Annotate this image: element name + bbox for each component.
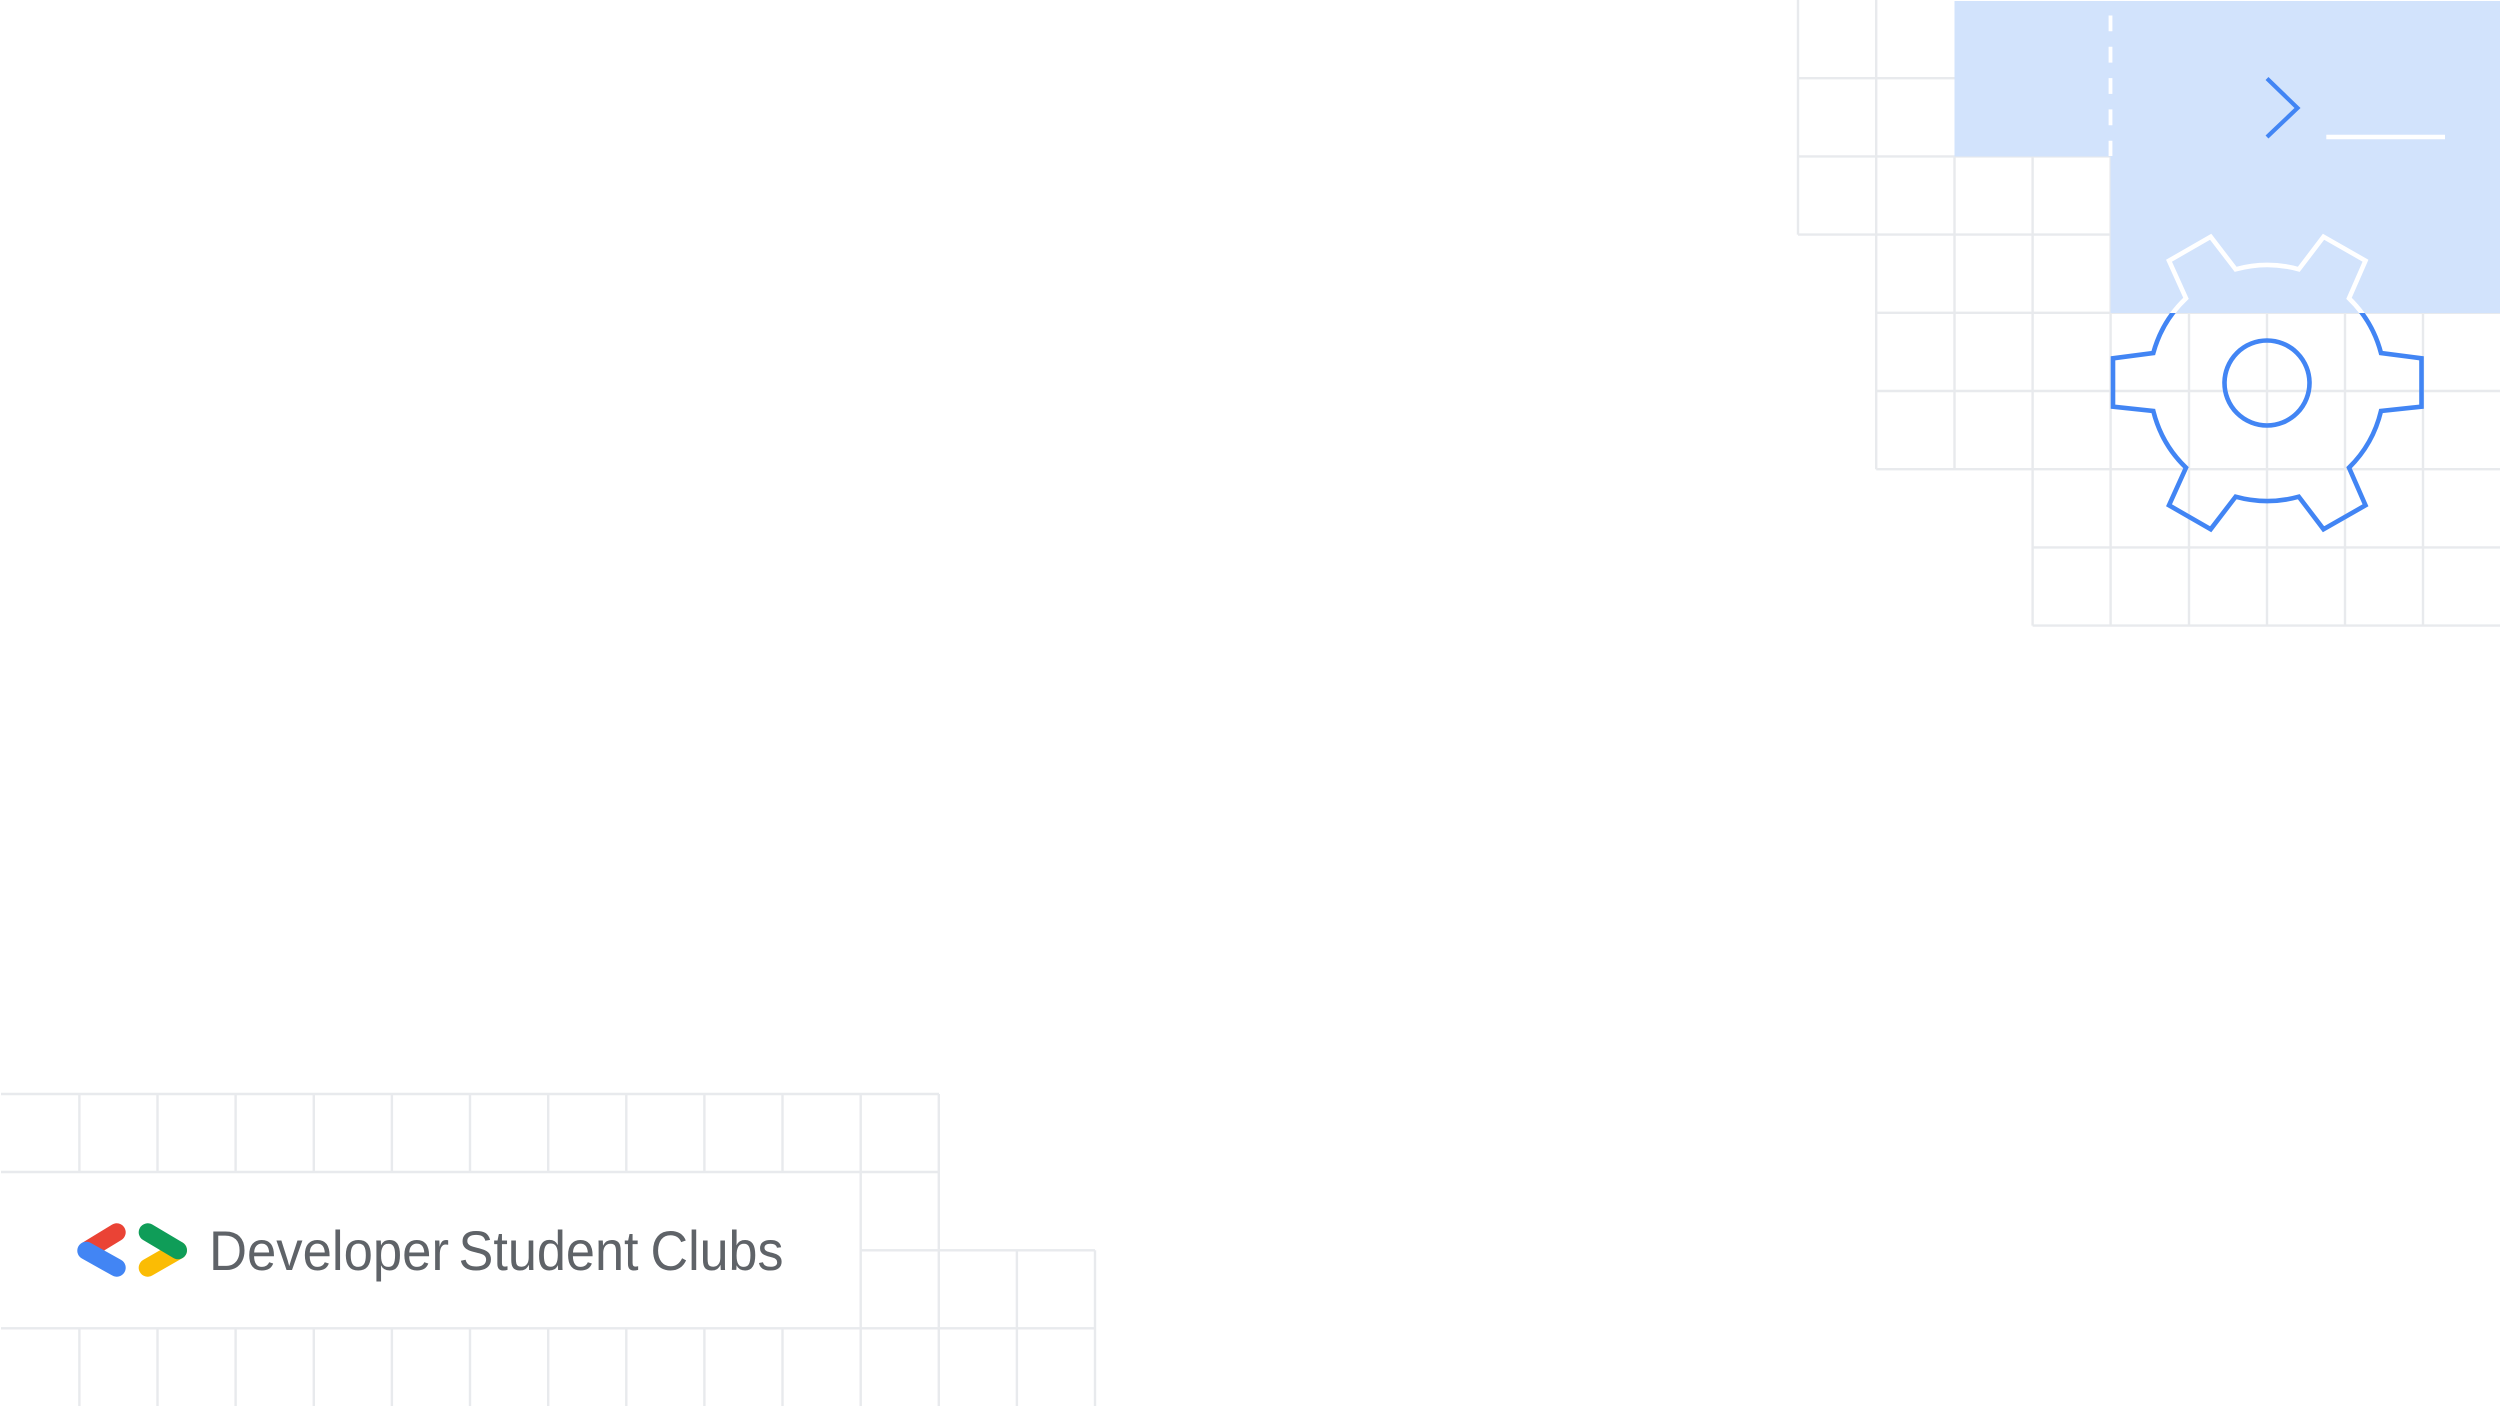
blue stroke (86, 1251, 117, 1268)
blue panel (1954, 1, 2500, 313)
prompt underscore (2326, 135, 2445, 139)
grid: top right (1798, 0, 2500, 626)
grid: bottom left (1, 1094, 1095, 1406)
logo: Developer Student Clubs (86, 1220, 784, 1282)
icon: terminal prompt (2267, 78, 2445, 137)
icon: developer chevrons (86, 1232, 178, 1268)
prompt chevron (2267, 78, 2298, 137)
gear part over grid (2110, 313, 2424, 532)
wordmark: Developer (209, 1220, 449, 1282)
wordmark: Student (458, 1220, 639, 1282)
green stroke (148, 1232, 178, 1250)
yellow stroke (148, 1250, 178, 1268)
wordmark: Clubs (650, 1220, 784, 1282)
red stroke (88, 1232, 117, 1250)
gear hub (2224, 340, 2310, 426)
icon: gear (2113, 237, 2422, 529)
wordmark (209, 1220, 784, 1282)
gear part over blue panel (2166, 234, 2368, 313)
dashed divider (2109, 16, 2112, 156)
